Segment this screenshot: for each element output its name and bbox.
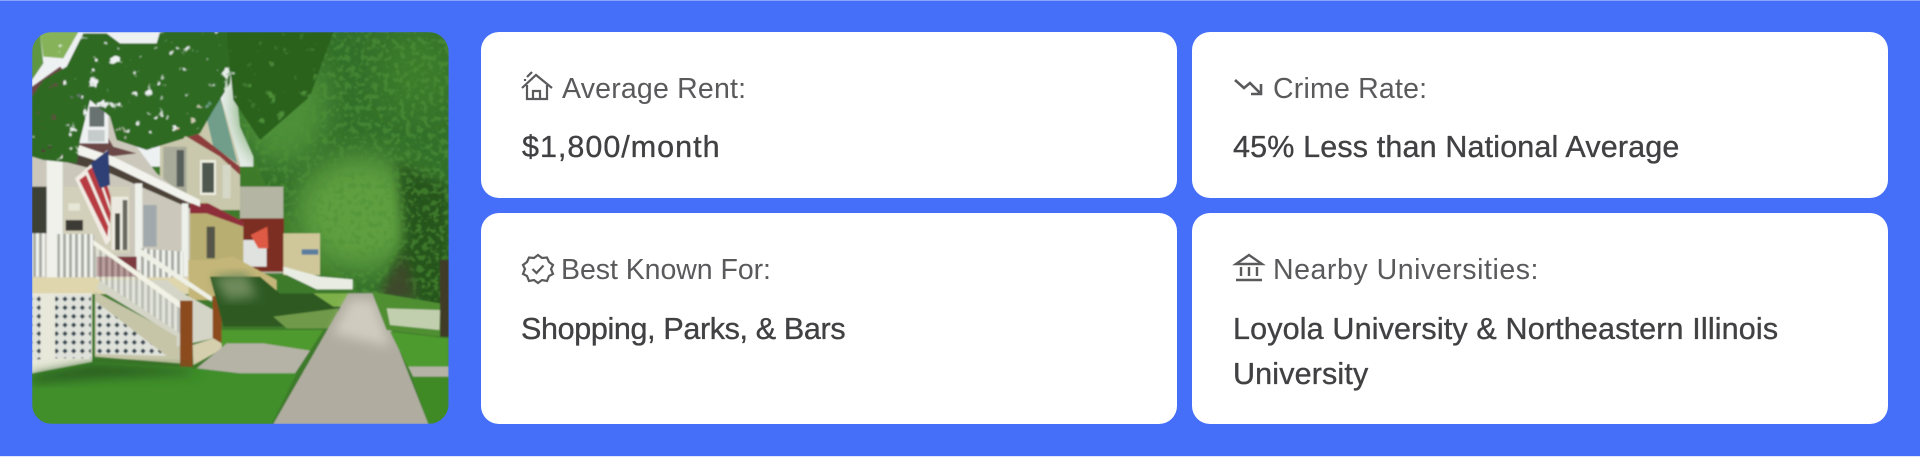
- distant houses: [240, 187, 283, 273]
- value: [1233, 312, 1778, 391]
- panel: nearby universities: [1192, 213, 1888, 424]
- panel: best known for: [481, 213, 1177, 424]
- value: Loyola University & Northeastern Illinois: [1233, 312, 1778, 346]
- left house: [32, 67, 190, 283]
- icon: trending down arrow: [1234, 79, 1262, 96]
- icon: house: [521, 71, 553, 100]
- American flag: [75, 150, 111, 245]
- icon: university building: [1232, 254, 1266, 282]
- panel: crime rate: [1192, 32, 1888, 198]
- stairs: [95, 292, 180, 363]
- porch rails: [32, 233, 45, 277]
- label: Average Rent:: [562, 73, 746, 105]
- panel: average rent: [481, 32, 1177, 198]
- icon: verified badge: [522, 254, 554, 284]
- sidewalk: [273, 293, 428, 424]
- label: Best Known For:: [561, 254, 771, 286]
- foreground foliage over house: [32, 32, 233, 163]
- shrubs and lawns: [210, 277, 343, 327]
- right tree canopy: [230, 32, 449, 300]
- value: $1,800/month: [522, 130, 721, 164]
- panel: neighborhood street photo: [32, 32, 449, 424]
- value: 45% Less than National Average: [1233, 130, 1680, 164]
- label: Nearby Universities:: [1273, 254, 1539, 286]
- value: University: [1233, 357, 1368, 391]
- sky: [32, 32, 253, 167]
- label: Crime Rate:: [1273, 73, 1427, 105]
- value: Shopping, Parks, & Bars: [521, 312, 845, 346]
- middle house: [160, 83, 240, 210]
